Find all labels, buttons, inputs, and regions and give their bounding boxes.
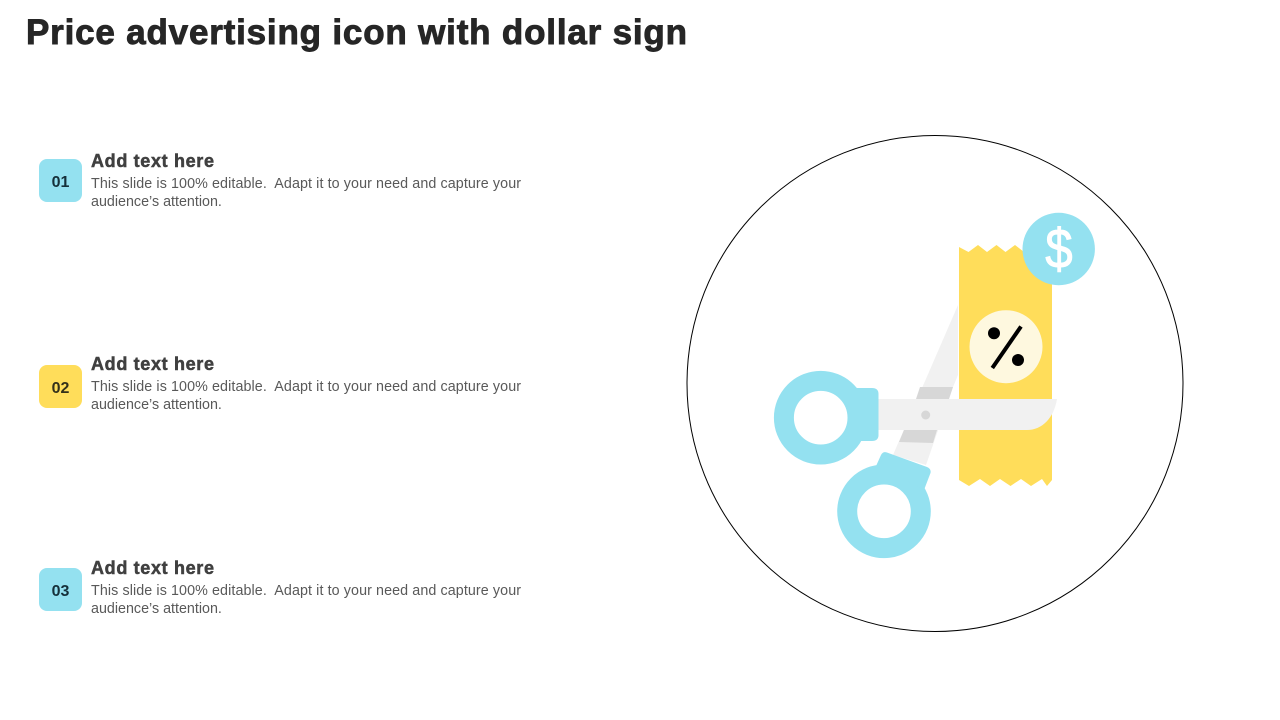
list item 02 bbox=[0, 0, 549, 413]
list item 03 bbox=[0, 0, 549, 617]
badge 03 bbox=[39, 568, 82, 611]
badge 01 bbox=[39, 159, 82, 202]
title: Price advertising icon with dollar sign bbox=[26, 13, 687, 52]
description 02: audience’s attention. bbox=[91, 397, 222, 413]
list item 01 bbox=[0, 0, 549, 210]
heading 01: Add text here bbox=[91, 151, 214, 171]
badge 02 bbox=[39, 365, 82, 408]
heading 03: Add text here bbox=[91, 558, 214, 578]
icon: scissors bbox=[784, 305, 1057, 548]
badge 03: 03 bbox=[52, 583, 70, 600]
icon: percent badge bbox=[970, 310, 1042, 383]
heading 02: Add text here bbox=[91, 354, 214, 374]
description 02: This slide is 100% editable. Adapt it to your need and capture your bbox=[91, 379, 521, 395]
icon: dollar badge: $ bbox=[1045, 218, 1073, 281]
lower handle bbox=[847, 452, 931, 548]
left handle bbox=[784, 381, 878, 455]
description 01: audience’s attention. bbox=[91, 194, 222, 210]
badge 02: 02 bbox=[52, 380, 70, 397]
description 03: audience’s attention. bbox=[91, 601, 222, 617]
icon: dollar badge bbox=[1022, 213, 1095, 285]
icon: price tag coupon bbox=[959, 245, 1052, 486]
pivot screw bbox=[921, 410, 930, 420]
outline circle bbox=[687, 136, 1183, 632]
upper blade bbox=[874, 399, 1057, 430]
description 01: This slide is 100% editable. Adapt it to your need and capture your bbox=[91, 176, 521, 192]
description 03: This slide is 100% editable. Adapt it to your need and capture your bbox=[91, 583, 521, 599]
badge 01: 01 bbox=[52, 174, 70, 191]
lower blade bbox=[893, 305, 958, 465]
blade shadow bands bbox=[899, 387, 953, 443]
